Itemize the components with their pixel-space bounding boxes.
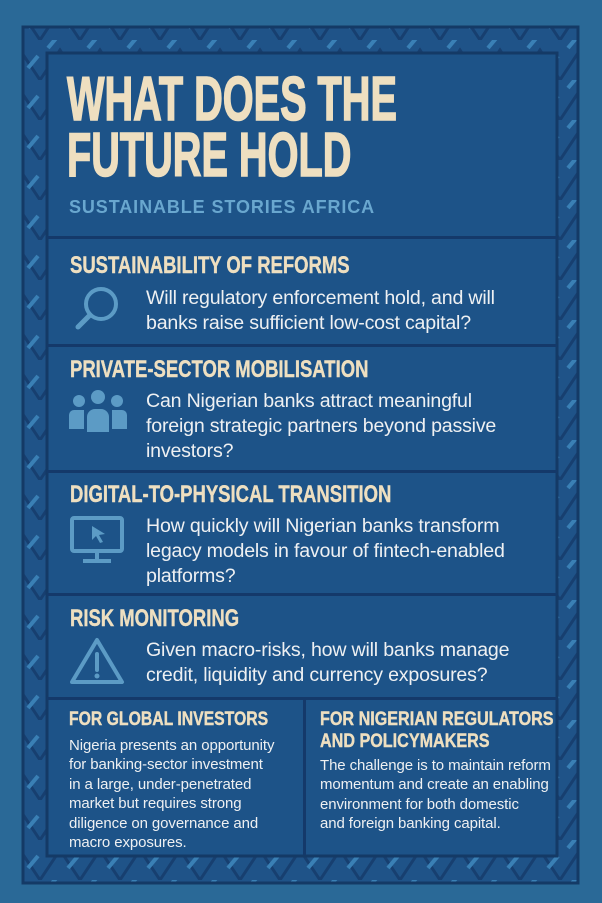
heading: DIGITAL-TO-PHYSICAL TRANSITION <box>70 481 391 508</box>
panel: risk monitoring <box>70 605 509 686</box>
heading: FOR GLOBAL INVESTORS <box>69 709 268 730</box>
text: Nigeria presents an opportunity <box>69 737 274 754</box>
panel: private-sector mobilisation <box>69 356 496 462</box>
icon: warning <box>70 638 124 684</box>
text: market but requires strong <box>69 795 241 812</box>
text <box>146 639 509 686</box>
text: foreign strategic partners beyond passive <box>146 415 496 437</box>
text: The challenge is to maintain reform <box>320 757 551 774</box>
subtitle: SUSTAINABLE STORIES AFRICA <box>69 197 375 217</box>
panel: for nigerian regulators <box>320 709 554 832</box>
text: macro exposures. <box>69 834 187 851</box>
heading <box>320 709 554 752</box>
text <box>146 287 495 334</box>
text: in a large, under-penetrated <box>69 776 251 793</box>
heading: PRIVATE-SECTOR MOBILISATION <box>70 356 368 383</box>
text <box>146 515 505 587</box>
heading: RISK MONITORING <box>70 605 239 632</box>
text: investors? <box>146 440 233 462</box>
text <box>320 757 551 832</box>
heading: SUSTAINABILITY OF REFORMS <box>70 252 350 279</box>
text: platforms? <box>146 565 235 587</box>
text: Will regulatory enforcement hold, and will <box>146 287 495 309</box>
text: credit, liquidity and currency exposures? <box>146 664 487 686</box>
panel: for global investors <box>69 709 274 851</box>
title: FUTURE HOLD <box>67 121 351 190</box>
text: legacy models in favour of fintech-enabled <box>146 540 505 562</box>
panel: digital-to-physical transition <box>70 481 505 587</box>
text: environment for both domestic <box>320 796 519 813</box>
text: momentum and create an enabling <box>320 776 549 793</box>
title <box>66 65 397 190</box>
text <box>146 390 496 462</box>
heading: AND POLICYMAKERS <box>320 731 490 752</box>
text: and foreign banking capital. <box>320 815 501 832</box>
icon: people <box>69 390 127 432</box>
icon: magnifier <box>76 287 118 330</box>
text: Given macro-risks, how will banks manage <box>146 639 509 661</box>
icon: monitor <box>70 516 124 563</box>
text: Can Nigerian banks attract meaningful <box>146 390 472 412</box>
text: How quickly will Nigerian banks transform <box>146 515 499 537</box>
text: banks raise sufficient low-cost capital? <box>146 312 471 334</box>
text: for banking-sector investment <box>69 756 263 773</box>
text <box>69 737 274 851</box>
text: diligence on governance and <box>69 815 258 832</box>
title: WHAT DOES THE <box>67 65 397 134</box>
panel: sustainability of reforms <box>70 252 495 334</box>
heading: FOR NIGERIAN REGULATORS <box>320 709 554 730</box>
